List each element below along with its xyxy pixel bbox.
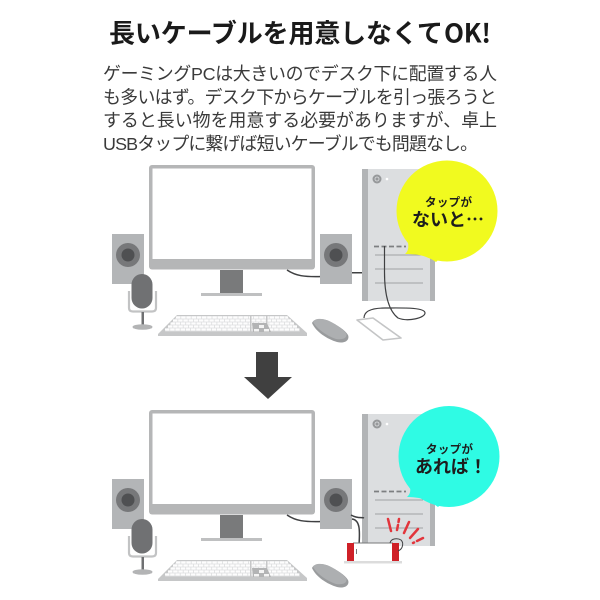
alert rays (388, 519, 423, 543)
phone (357, 318, 401, 340)
cables: speaker to tap (351, 515, 364, 545)
right speaker (320, 234, 352, 284)
bubble text (415, 441, 487, 479)
microphone (129, 519, 156, 575)
left speaker (112, 479, 144, 529)
cable: monitor to tower (287, 515, 322, 522)
title: OK! (444, 14, 491, 50)
bubble text: タップが (425, 194, 472, 210)
PC tower (362, 414, 435, 546)
bubble text: あれば！ (415, 453, 487, 479)
keyboard (158, 315, 307, 336)
bubble text (412, 194, 484, 232)
keyboard (158, 560, 307, 581)
mouse (312, 319, 348, 343)
speech bubble: with tap (398, 406, 500, 507)
body text (103, 64, 497, 154)
right speaker (320, 479, 352, 529)
left speaker (112, 234, 144, 284)
bubble text: タップが (426, 441, 474, 457)
mouse (312, 564, 348, 588)
bubble text: ないと⋯ (412, 206, 484, 232)
scene: with tap (112, 406, 500, 588)
monitor (149, 165, 315, 296)
body text: すると長い物を用意する必要がありますが、卓上 (103, 110, 497, 130)
PC tower (362, 169, 435, 301)
USB tap (344, 539, 403, 564)
arrow (244, 352, 292, 399)
title: 長いケーブルを用意しなくて (109, 14, 443, 50)
body text: も多いはず。デスク下からケーブルを引っ張ろうと (103, 86, 497, 108)
scene: without tap (112, 160, 498, 343)
microphone (129, 274, 156, 330)
cable: monitor to tower (287, 270, 364, 277)
body text: ゲーミングPCは大きいのでデスク下に配置する人 (103, 64, 497, 84)
short cable (390, 539, 403, 551)
monitor (149, 410, 315, 541)
body text: USBタップに繋げば短いケーブルでも問題なし。 (103, 133, 478, 154)
long cable to phone (364, 246, 425, 320)
speech bubble: without tap (396, 160, 498, 262)
